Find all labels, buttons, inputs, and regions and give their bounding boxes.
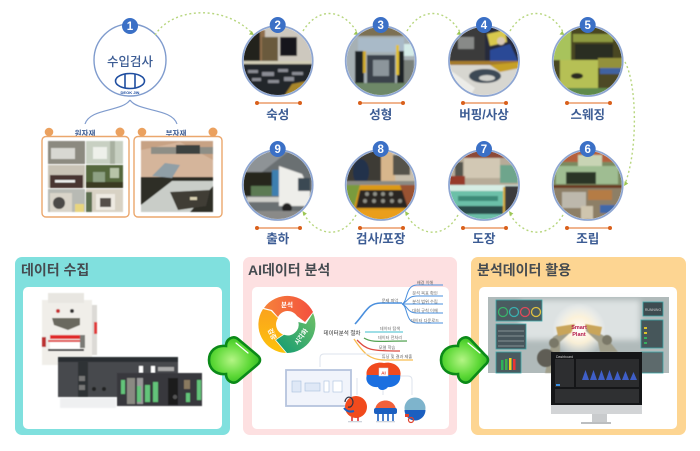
overlay: table panel [641,352,663,373]
underline [358,101,405,105]
overlay: running status: RUNNING [645,308,661,312]
overlay: running status [643,302,663,316]
underline [461,101,508,105]
heading: AI데이터 분석: AI데이터 분석 [248,262,330,278]
underline [565,101,612,105]
step 1: incoming inspection [85,18,177,124]
overlay: status list [641,320,663,348]
heading: 수입검사: 수입검사 [107,55,153,69]
label: 도장: 도장 [472,232,496,246]
step 9: 출하 [243,141,313,246]
mind map: analysis procedure: 모델 학습 [379,344,395,351]
label: Smart Plant: Plant [572,332,586,338]
mind map: analysis procedure: 데이터 다운로드 [411,317,439,324]
mind map: analysis procedure: 문제 파악 [382,297,398,304]
inspection circle [94,24,166,96]
donut cycle diagram: 검증 [266,327,279,341]
robot: sphere [404,398,426,422]
overlay: gauge panel [496,300,542,321]
label: 원자재: 원자재 [75,128,95,138]
AI brain: AI [381,370,386,376]
photo: aging [243,27,313,96]
press machine [42,293,97,365]
photo: forming press [346,26,416,96]
arrow: analysis to usage [441,337,488,383]
mind map: analysis procedure: 분석 범위 수립 [412,298,438,305]
photo: inspection and packing [346,150,416,220]
PLC controller, back row [58,357,178,397]
process flow dotted arrows [155,13,634,232]
raw material photos [48,141,123,212]
sub material photo [141,141,213,212]
badge 7: 7 [481,144,487,156]
mind map: analysis procedure: 배경 이해 [417,279,433,286]
chart peaks [582,370,637,380]
badge 4: 4 [481,20,488,32]
mind map: analysis procedure: 데이터 전처리 [378,334,402,341]
heading: 데이터 수집: 데이터 수집 [21,262,89,278]
step 6: 조립 [553,141,623,246]
mind map: analysis procedure: 분석 목표 확인 [412,290,438,296]
photo: shipping truck [243,150,313,220]
photo: buffing [449,26,520,96]
monitor stand [581,414,611,424]
heading: 분석데이터 활용: 분석데이터 활용 [477,262,571,278]
monitor dashboard [551,352,642,424]
overlay: bar panel [496,352,521,373]
label: 성형: 성형 [369,107,392,122]
mind map: analysis procedure: 데이터 탐색 [380,325,400,332]
controller reflection [60,398,116,408]
badge 3: 3 [377,20,384,32]
robot: dome [374,400,397,422]
mind map: analysis procedure: 튜닝 및 결과 제출 [382,353,412,360]
label: 숙성: 숙성 [266,108,289,122]
underline [565,226,612,230]
label: 버핑/사상: 버핑/사상 [459,108,509,122]
badge 1: 1 [127,21,134,33]
badge 9: 9 [274,144,281,156]
label: 조립: 조립 [576,232,599,246]
photo: swaging machine [553,26,623,96]
step 5: 스웨징 [553,17,623,122]
photo: painting [449,150,519,220]
badge 6: 6 [584,144,591,156]
underline [461,226,508,230]
label: Smart Plant [571,325,587,338]
raw materials box [42,128,129,217]
monitor dashboard: Dashboard [556,355,573,359]
company logo: DEOK JIN [121,90,140,95]
label: 출하: 출하 [266,232,290,246]
underline [255,226,302,230]
badge 2: 2 [274,20,281,32]
whiteboard with cards [286,370,351,406]
step 3: 성형 [346,17,416,122]
step 8: 검사/포장 [346,141,416,246]
donut cycle diagram [258,296,315,353]
label: 부자재: 부자재 [166,128,186,138]
mind map: analysis procedure: 데이터분석 절차 [324,329,360,337]
label: Smart Plant: Smart [571,325,587,331]
connector lines [320,354,412,395]
connector curves [85,100,177,124]
label: 검사/포장: 검사/포장 [356,232,406,246]
robot arms [537,324,618,373]
step 2: 숙성 [243,17,313,122]
panel: AI data analysis [243,257,457,435]
sub materials box [134,128,222,217]
underline [358,226,405,230]
AI brain [366,363,401,390]
donut cycle diagram: 분석 [281,300,293,309]
overlay: list panel [496,324,526,349]
step 4: 버핑/사상 [449,17,520,122]
arrow: collection to analysis [209,337,260,383]
badge 5: 5 [584,20,591,32]
underline [255,101,302,105]
mind map: analysis procedure: 대회 규칙 이해 [412,307,438,314]
donut cycle diagram: 시각화 [292,327,310,347]
panel: data collection [15,257,230,435]
photo: assembly [553,150,623,220]
step 7: 도장 [449,141,519,246]
label: 스웨징: 스웨징 [570,108,605,122]
badge 8: 8 [377,144,384,156]
robot: red [344,396,367,422]
PLC controller, front row [117,373,202,406]
mind map: analysis procedure [324,279,443,360]
panel: analysis data usage [471,257,686,435]
smart plant image [488,297,669,373]
